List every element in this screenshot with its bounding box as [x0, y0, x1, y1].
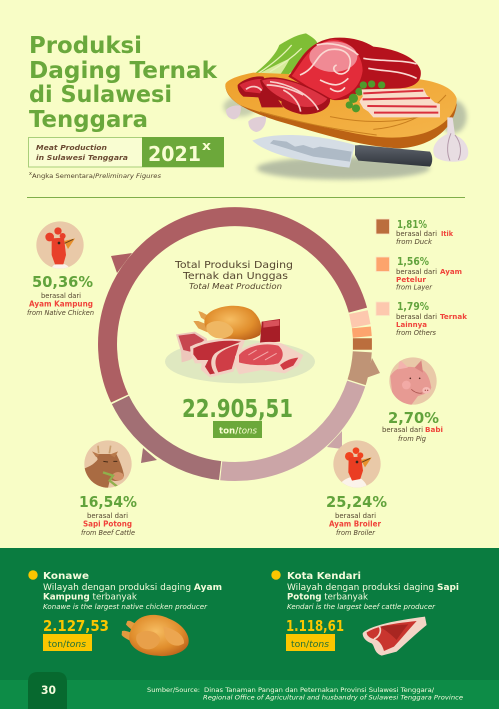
label: pig	[382, 409, 443, 443]
footnote: x	[29, 171, 32, 177]
slices	[238, 76, 283, 107]
chart centre heading: Total Meat Production	[189, 282, 282, 291]
legend: duck	[376, 219, 453, 246]
chart centre heading: Total Produksi Daging	[174, 260, 293, 271]
total value: 22.905,51	[182, 394, 293, 423]
garlic	[433, 117, 468, 162]
illustration: meat on cutting board	[223, 33, 468, 180]
knife	[252, 135, 355, 168]
legend: others: Ternak	[440, 313, 467, 321]
icon: broiler	[333, 440, 381, 488]
footer band	[0, 680, 499, 709]
icon: native chicken	[36, 221, 84, 269]
callout: Konawe	[28, 570, 222, 651]
label: beef cattle	[79, 493, 137, 537]
total unit badge: ton/tons	[219, 426, 257, 436]
subtitle banner with year: x	[202, 139, 211, 153]
label: beef cattle: 16,54%	[79, 493, 137, 511]
callout: Konawe: Wilayah dengan produksi daging Ayam	[43, 583, 222, 593]
title: Produksi	[29, 31, 142, 59]
legend: others: Lainnya	[396, 321, 427, 329]
legend: others: 1,79%	[397, 301, 429, 313]
legend: others: from Others	[396, 329, 436, 337]
panel: top producers	[0, 548, 499, 680]
title: Tenggara	[29, 105, 148, 133]
board top	[225, 73, 457, 138]
callout: Kota Kendari: Potong terbanyak	[287, 592, 368, 602]
page number tab: 30	[41, 683, 56, 697]
label: broiler: from Broiler	[336, 529, 376, 537]
source note: Sumber/Source:	[147, 687, 200, 694]
legend: layer: from Layer	[396, 284, 433, 292]
chart centre heading: Ternak dan Unggas	[182, 271, 288, 282]
callout: Kota Kendari	[271, 570, 459, 651]
label: native chicken: from Native Chicken	[27, 309, 94, 317]
legend: layer: Ayam	[440, 268, 462, 276]
callout: Konawe: 2.127,53	[43, 617, 109, 635]
label: native chicken: Ayam Kampung	[29, 300, 93, 308]
legend: layer	[376, 256, 462, 292]
title: Daging Ternak	[29, 56, 218, 84]
label: broiler: Ayam Broiler	[329, 520, 381, 528]
callout: Kota Kendari: Kota Kendari	[287, 571, 361, 582]
label: beef cattle: berasal dari	[87, 512, 128, 520]
source note	[147, 687, 463, 702]
subtitle banner with year: Meat Production	[36, 143, 107, 152]
source note: Regional Office of Agricultural and husbandry of Sulawesi Tenggara Province	[203, 694, 463, 702]
callout: Konawe: Konawe is the largest native chicken producer	[43, 603, 208, 611]
segment: broiler	[221, 384, 356, 472]
illustration: chicken and meat on plate	[165, 306, 315, 383]
source note: Dinas Tanaman Pangan dan Peternakan Provinsi Sulawesi Tenggara/	[204, 687, 435, 694]
icon: pig	[389, 357, 437, 405]
callout: Konawe: Konawe	[43, 571, 89, 582]
callout: Kota Kendari: 1.118,61	[286, 617, 344, 635]
legend: layer: Petelur	[396, 276, 427, 284]
legend: layer: 1,56%	[397, 256, 429, 268]
page number tab	[28, 672, 67, 709]
total unit badge	[213, 421, 262, 438]
label: beef cattle: Sapi Potong	[83, 520, 132, 528]
illustration: roast chicken	[122, 615, 189, 656]
icon: beef cattle	[83, 440, 132, 488]
title	[29, 31, 218, 133]
subtitle banner with year: in Sulawesi Tenggara	[36, 153, 128, 162]
label: broiler: berasal dari	[335, 512, 376, 520]
legend: others	[376, 301, 467, 337]
subtitle banner with year: 2021	[148, 142, 201, 166]
label: native chicken	[27, 273, 94, 317]
segment: others	[358, 312, 361, 326]
legend: layer: berasal dari	[396, 268, 437, 276]
title: di Sulawesi	[29, 80, 172, 108]
callout: Konawe: Kampung terbanyak	[43, 592, 137, 602]
legend: duck: 1,81%	[397, 219, 427, 231]
label: beef cattle: from Beef Cattle	[81, 529, 135, 537]
label: pig: 2,70%	[388, 409, 439, 427]
legend: duck: berasal dari	[396, 230, 437, 238]
legend: duck: from Duck	[396, 238, 433, 246]
parsley	[346, 80, 385, 112]
footnote: Angka Sementara/ Preliminary Figures	[32, 173, 162, 180]
garlic cloves	[226, 105, 241, 119]
label: broiler	[326, 493, 387, 537]
callout: Kota Kendari: Kendari is the largest beef cattle producer	[287, 603, 436, 611]
segment: pig	[357, 352, 380, 382]
callout: Kota Kendari: Wilayah dengan produksi daging Sapi	[287, 583, 459, 593]
subtitle banner with year	[28, 137, 224, 167]
label: broiler: 25,24%	[326, 493, 387, 511]
label: native chicken: berasal dari	[41, 292, 81, 300]
chart centre heading	[174, 260, 293, 291]
segment: native chicken	[108, 217, 358, 398]
callout: Konawe: ton/tons	[48, 639, 86, 650]
segment: layer	[352, 327, 372, 337]
callout: Kota Kendari: ton/tons	[291, 639, 329, 650]
illustration: beef steak	[363, 617, 427, 656]
roast	[288, 38, 421, 100]
board side	[225, 83, 457, 148]
label: native chicken: 50,36%	[32, 273, 93, 291]
lettuce	[252, 33, 317, 76]
label: pig: berasal dari	[382, 426, 423, 434]
legend: duck: Itik	[441, 230, 453, 238]
legend: others: berasal dari	[396, 313, 437, 321]
bacon	[359, 88, 440, 117]
donut chart: share of meat production	[108, 217, 380, 472]
segment: duck	[353, 338, 372, 350]
label: pig: from Pig	[398, 435, 427, 443]
segment: beef cattle	[120, 400, 220, 471]
label: pig: Babi	[425, 426, 443, 434]
